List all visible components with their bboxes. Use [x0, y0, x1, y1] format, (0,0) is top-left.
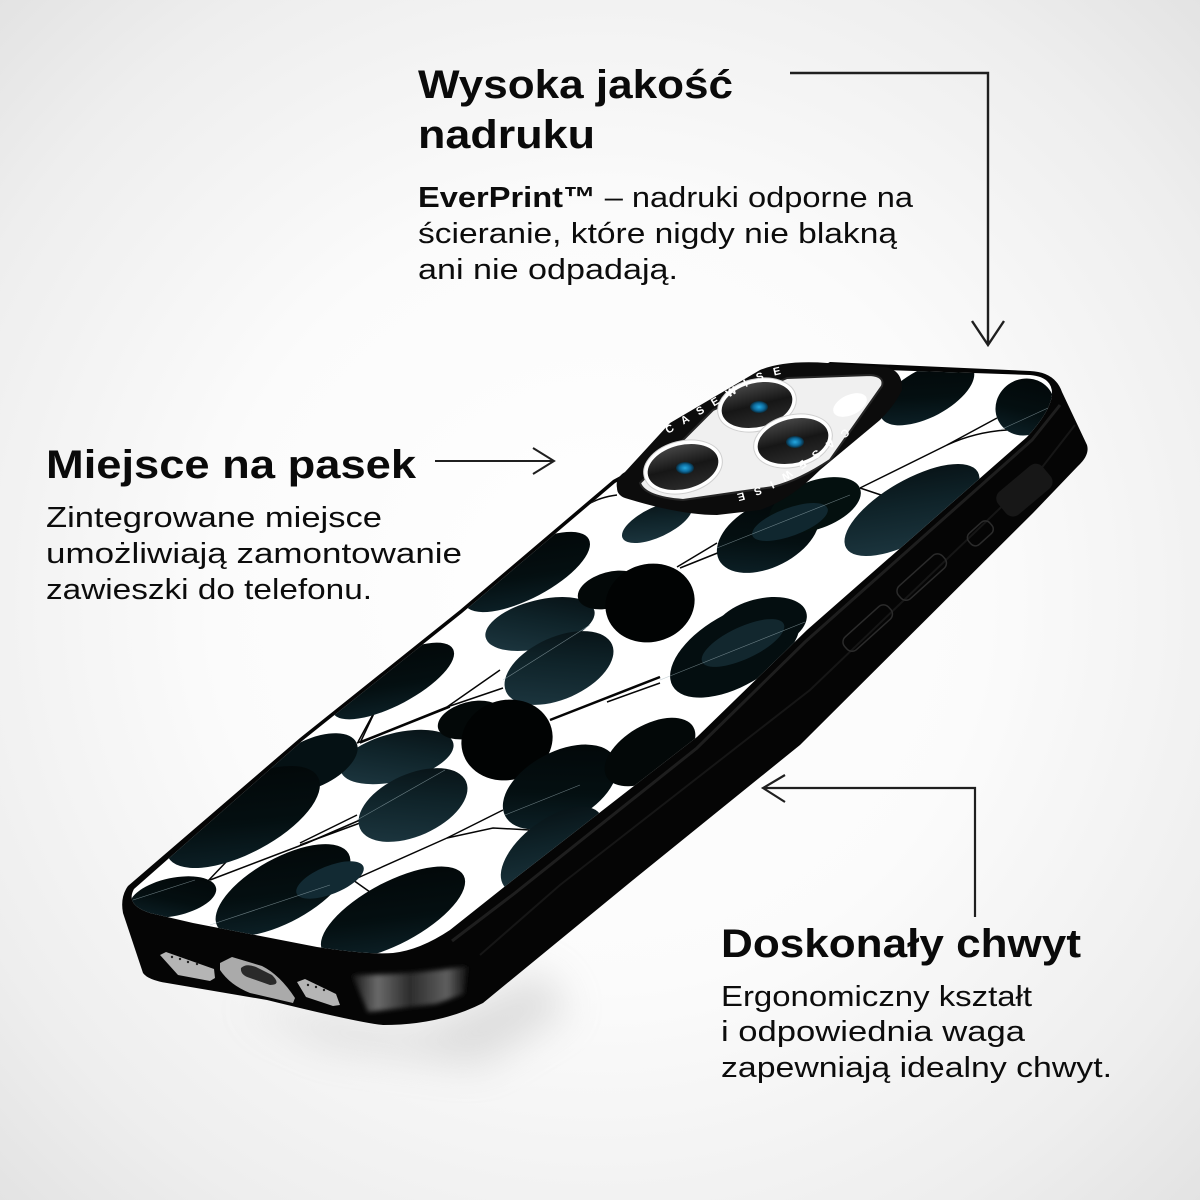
- description: Ergonomiczny kształt: [721, 981, 1032, 1013]
- heading: Miejsce na pasek: [46, 443, 417, 487]
- corner gloss: [352, 966, 468, 1012]
- arrow to grip: [763, 775, 975, 917]
- description: Zintegrowane miejsce: [46, 502, 382, 534]
- lens top: [712, 370, 802, 440]
- description: [721, 981, 1112, 1084]
- description: [46, 502, 462, 606]
- camera island: [616, 362, 902, 515]
- description: umożliwiają zamontowanie: [46, 538, 462, 570]
- left speaker: [160, 952, 215, 981]
- side buttons: [840, 460, 1056, 654]
- leaf veins: [133, 408, 1048, 925]
- description: i odpowiednia waga: [721, 1016, 1026, 1048]
- lens right: [748, 406, 838, 476]
- brand text top: CASEWISE: [666, 366, 781, 433]
- arrow to strap slot: [435, 448, 554, 474]
- stems: [207, 418, 1007, 917]
- description: EverPrint™ – nadruki odporne na: [418, 182, 914, 214]
- heading: Wysoka jakość: [418, 63, 733, 107]
- case body: [122, 362, 1088, 1025]
- heading: nadruku: [418, 113, 595, 157]
- right speaker: [297, 979, 340, 1006]
- description: ścieranie, które nigdy nie blakną: [418, 218, 898, 250]
- phone shadow: [240, 970, 570, 1065]
- charging port: [220, 957, 295, 1003]
- printed back panel: [132, 370, 1052, 954]
- case side edge highlight: [452, 405, 1060, 941]
- heading: [418, 63, 733, 157]
- brand text bottom: CASEWISE: [737, 430, 849, 502]
- description: zapewniają idealny chwyt.: [721, 1052, 1112, 1084]
- description: zawieszki do telefonu.: [46, 574, 372, 606]
- arrow to print: [790, 73, 1004, 345]
- leaves: [126, 347, 1065, 978]
- description: [418, 182, 914, 286]
- callout: strap slot: [46, 443, 554, 606]
- lens left: [638, 432, 728, 502]
- description: ani nie odpadają.: [418, 254, 678, 286]
- phone case illustration: [122, 362, 1088, 1025]
- callout: print quality: [418, 63, 1004, 345]
- clear camera window: [640, 375, 882, 500]
- heading: Doskonały chwyt: [721, 922, 1081, 966]
- callout: grip: [721, 775, 1112, 1084]
